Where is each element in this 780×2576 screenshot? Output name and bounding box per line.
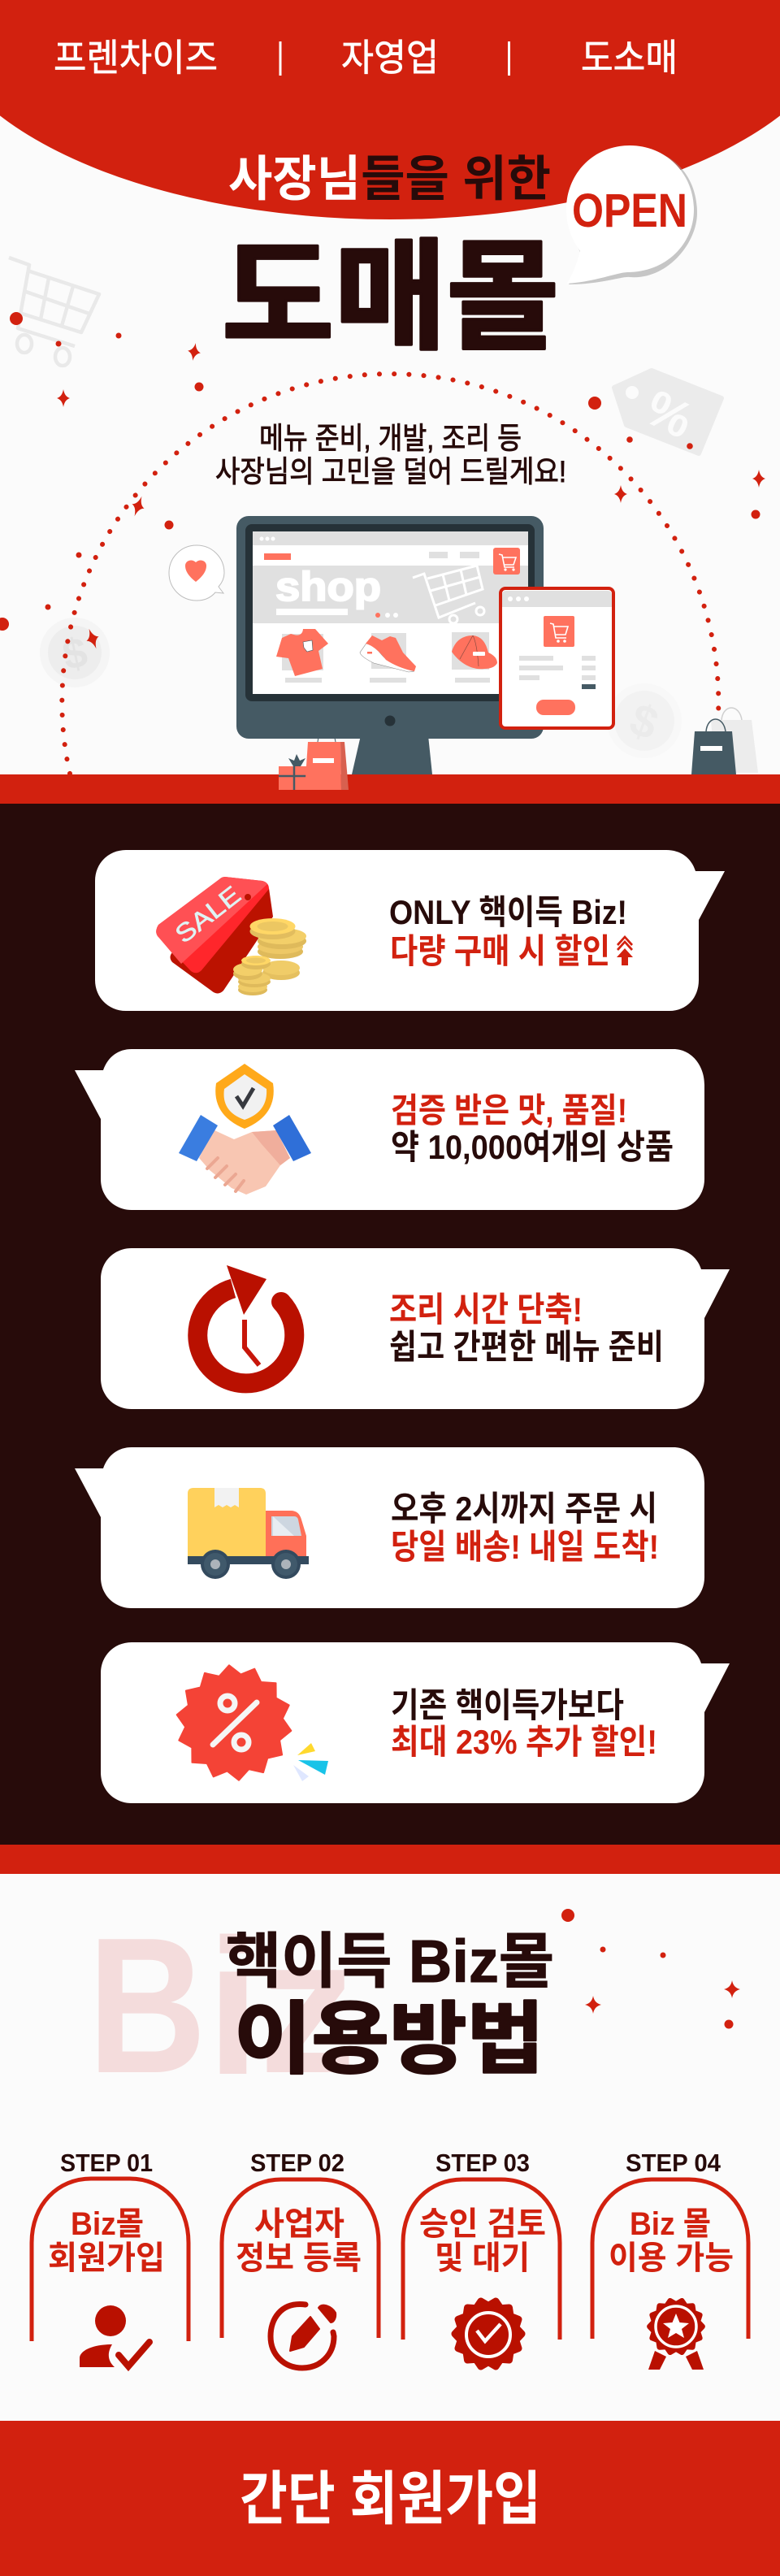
icon: up arrow — [617, 935, 633, 965]
step 2: 정보 등록 — [236, 2240, 362, 2276]
card 1: bulk discount — [95, 850, 725, 1011]
icon: gray dollar coin right: $ — [623, 693, 665, 749]
subtitle text — [215, 422, 566, 488]
screen — [253, 531, 528, 694]
step 1 — [32, 2149, 188, 2367]
dotted arc — [62, 374, 718, 774]
step 4: 이용 가능 — [609, 2240, 734, 2276]
icon: gray price tag: % — [637, 379, 702, 449]
step 1: Biz몰 — [71, 2206, 144, 2242]
text: card 1: ONLY 핵이득 Biz! — [389, 893, 627, 931]
icon: sale tag and coins: SALE — [170, 880, 246, 949]
watermark: Biz: i — [206, 1900, 260, 2115]
navigation — [54, 37, 678, 79]
icon: gray price tag — [614, 371, 722, 453]
icon: shield and handshake — [179, 1064, 311, 1195]
panel: hero background decorations — [0, 258, 765, 774]
footer button — [0, 2421, 780, 2576]
text: card 5: 기존 핵이득가보다 — [391, 1686, 624, 1724]
step 4 — [592, 2149, 748, 2370]
icon: check badge — [455, 2301, 522, 2366]
heading: how to use: 이용방법 — [234, 1995, 544, 2084]
card 4: delivery — [75, 1447, 704, 1608]
icon: gray dollar coin right — [607, 683, 682, 758]
how-to decorations — [561, 1909, 740, 2028]
title: 도매몰: 도매몰 — [222, 231, 559, 365]
card 1: bulk discount: 다량 구매 시 할인 — [390, 932, 610, 970]
icon: heart bubble — [169, 545, 224, 601]
card 5: extra discount — [101, 1642, 730, 1803]
illustration: monitor with shop: shop — [275, 564, 381, 609]
panel: benefits background — [0, 804, 780, 1845]
callout: OPEN bubble: OPEN — [572, 184, 687, 237]
icon: percent badge — [169, 1659, 328, 1786]
icon: award ribbon — [648, 2301, 704, 2370]
callout: OPEN bubble — [566, 145, 697, 284]
icon: clock with arrow — [197, 1265, 294, 1383]
product: t-shirt — [276, 629, 328, 683]
text: card 2: 검증 받은 맛, 품질! — [391, 1091, 627, 1130]
card 3: cooking time — [101, 1248, 730, 1409]
step 1: 회원가입 — [48, 2240, 165, 2276]
subtitle text: 메뉴 준비, 개발, 조리 등 — [259, 422, 522, 455]
banner — [253, 566, 528, 623]
monitor body — [236, 516, 544, 739]
icon: right shopping bags — [691, 708, 758, 774]
red divider band — [0, 1845, 780, 1874]
title: 사장님들을 위한: 사장님들을 위한 — [228, 152, 551, 206]
card 2: verified quality — [75, 1049, 704, 1210]
step 4: STEP 04 — [626, 2149, 722, 2177]
card 3: cooking time: 쉽고 간편한 메뉴 준비 — [389, 1328, 664, 1366]
icon: white cart on banner — [413, 566, 484, 623]
product: cap — [452, 632, 497, 683]
footer button: 간단 회원가입 — [240, 2467, 541, 2532]
card 5: extra discount: 최대 23% 추가 할인! — [391, 1723, 657, 1761]
step 2 — [222, 2149, 379, 2368]
step 3: 및 대기 — [435, 2240, 530, 2276]
icon: delivery truck — [188, 1488, 309, 1579]
product: shoe — [360, 633, 416, 683]
icon: gray dollar coin left — [40, 618, 110, 687]
big coin stack — [250, 918, 306, 980]
icon: gray shopping cart — [9, 258, 99, 366]
step 2: 사업자 — [254, 2206, 344, 2242]
illustration: monitor with shop — [236, 516, 758, 790]
subtitle text: 사장님의 고민을 덜어 드릴게요! — [215, 455, 566, 488]
icon: gray dollar coin left: $ — [58, 629, 92, 679]
icon: pencil circle — [271, 2305, 336, 2368]
icon: member check — [80, 2305, 150, 2367]
step 3: 승인 검토 — [419, 2206, 546, 2242]
red band under hero — [0, 774, 780, 804]
icon: cart button — [493, 548, 520, 575]
card 2: verified quality: 약 10,000여개의 상품 — [391, 1128, 674, 1166]
heading: how to use — [226, 1928, 554, 2084]
navigation: 프렌차이즈 — [54, 37, 218, 79]
monitor stand — [352, 735, 432, 774]
step 3: STEP 03 — [436, 2149, 530, 2177]
watermark: Biz — [88, 1898, 356, 2115]
navigation: 자영업 — [341, 37, 439, 79]
text: card 4: 오후 2시까지 주문 시 — [391, 1490, 657, 1528]
red dots and sparkles — [0, 312, 765, 651]
tablet — [500, 588, 613, 728]
watermark: Biz: B — [88, 1898, 206, 2114]
header red ellipse — [0, 0, 780, 219]
card 4: delivery: 당일 배송! 내일 도착! — [391, 1528, 659, 1566]
heading: how to use: 핵이득 Biz몰 — [226, 1928, 554, 1995]
step 4: Biz 몰 — [630, 2206, 711, 2242]
step 2: STEP 02 — [250, 2149, 344, 2177]
icon: gift and shopping bag — [279, 730, 349, 790]
text: card 3: 조리 시간 단축! — [389, 1290, 583, 1329]
icon: sale tag and coins — [156, 877, 306, 995]
small coin stack — [233, 956, 271, 995]
watermark: Biz: z — [259, 1898, 356, 2114]
step 3 — [403, 2149, 560, 2366]
step 1: STEP 01 — [60, 2149, 153, 2177]
navigation: 도소매 — [581, 37, 678, 79]
